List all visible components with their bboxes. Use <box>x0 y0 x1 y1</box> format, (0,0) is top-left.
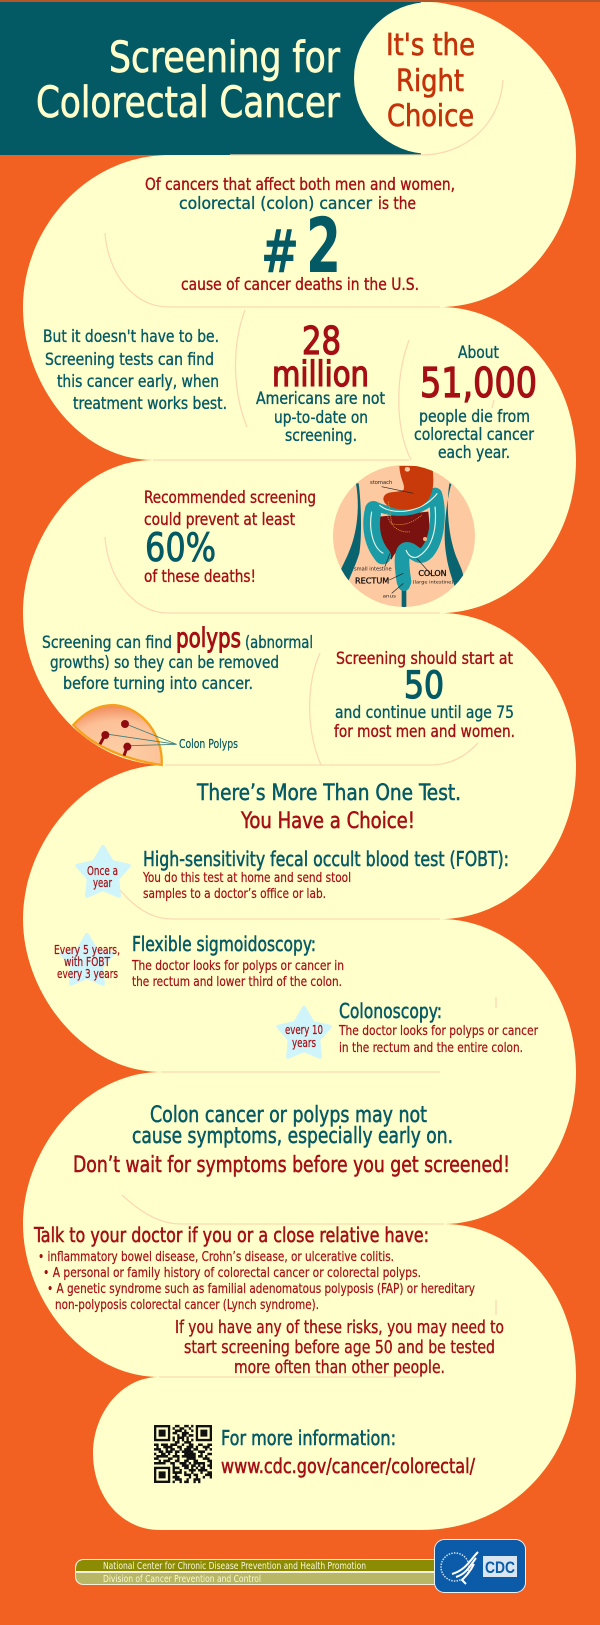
stat: 51,000: people die from <box>419 407 530 427</box>
text: no symptoms warning: Colon cancer or polyps may not <box>150 1103 427 1128</box>
risk factors list <box>33 1223 475 1313</box>
tagline: It's the Right Choice: It's the <box>386 28 475 63</box>
text: no symptoms warning: cause symptoms, especially early on. <box>132 1124 453 1149</box>
risk factors list: • A genetic syndrome such as familial adenomatous polyposis (FAP) or hereditary <box>47 1281 475 1297</box>
footer agency bar: National Center for Chronic Disease Prevention and Health Promotion <box>103 1561 366 1572</box>
stat: 28 million: Americans are not <box>256 389 385 409</box>
icon: digestive system anatomy: (large intestine) <box>413 580 454 586</box>
risk factors list: • inflammatory bowel disease, Crohn’s disease, or ulcerative colitis. <box>38 1249 394 1265</box>
test: colonoscopy: The doctor looks for polyps or cancer <box>338 1023 538 1039</box>
risk factors list: • A personal or family history of colorectal cancer or colorectal polyps. <box>43 1265 421 1281</box>
stat: 51,000: 51,000 <box>420 359 537 407</box>
label: Colon Polyps: Colon Polyps <box>179 737 238 751</box>
icon: star every 10 years <box>278 1008 330 1057</box>
title <box>36 33 340 128</box>
text: polyps: Screening can find <box>42 633 172 653</box>
CDC and HHS logo: CDC <box>485 1558 515 1577</box>
text: earlier screening advice: more often than other people. <box>234 1357 445 1378</box>
stat: 51,000: each year. <box>438 443 510 463</box>
tagline: It's the Right Choice <box>386 28 475 134</box>
caption: cause of cancer deaths in the U.S. <box>181 275 419 295</box>
title: Screening for <box>109 33 340 83</box>
intro text <box>145 175 455 214</box>
intro text: colorectal (colon) cancer <box>179 194 373 214</box>
icon: QR code <box>154 1425 212 1483</box>
stat: 28 million: million <box>272 355 369 395</box>
stat: start at 50: 50 <box>404 664 444 707</box>
risk factors list: Talk to your doctor if you or a close relative have: <box>33 1223 429 1247</box>
test: FOBT: High-sensitivity fecal occult blood test (FOBT): <box>143 847 509 871</box>
stat: 28 million: up-to-date on <box>274 408 368 428</box>
stat: start at 50: Screening should start at <box>336 649 513 669</box>
text: polyps: polyps <box>176 623 241 654</box>
test: FOBT: You do this test at home and send stool <box>142 870 351 886</box>
text: it doesn't have to be <box>43 327 227 414</box>
stat: start at 50: and continue until age 75 <box>335 703 514 723</box>
stat: prevent 60%: 60% <box>145 526 216 571</box>
CDC and HHS logo <box>434 1540 526 1592</box>
test: flexible sigmoidoscopy <box>131 932 344 990</box>
icon: star every 10 years: every 10 <box>285 1023 323 1037</box>
text: earlier screening advice: start screening before age 50 and be tested <box>184 1337 495 1358</box>
more information link: For more information: <box>221 1426 396 1450</box>
text: no symptoms warning: Don’t wait for symptoms before you get screened! <box>73 1153 510 1178</box>
icon: star every 5 years: every 3 years <box>57 967 118 981</box>
text: no symptoms warning <box>73 1103 510 1178</box>
text: polyps: (abnormal <box>245 633 313 653</box>
big number #2: # <box>261 217 299 287</box>
intro text: is the <box>378 194 416 214</box>
icon: star once a year: year <box>93 876 112 890</box>
heading: more than one test <box>196 781 461 834</box>
more information link: www.cdc.gov/cancer/colorectal/ <box>221 1454 476 1478</box>
big number #2: 2 <box>306 201 341 290</box>
title: Colorectal Cancer <box>36 78 340 128</box>
stat: 51,000: colorectal cancer <box>414 425 535 445</box>
stat: 28 million <box>256 319 385 446</box>
stat: prevent 60%: of these deaths! <box>144 567 256 587</box>
test: colonoscopy <box>338 999 538 1056</box>
tagline: It's the Right Choice: Right <box>396 64 464 99</box>
stat: start at 50 <box>334 649 515 742</box>
text: it doesn't have to be: treatment works best. <box>73 394 227 414</box>
panel: number two cause <box>145 175 455 295</box>
stat: prevent 60% <box>144 488 316 587</box>
intro text: Of cancers that affect both men and women, <box>145 175 455 195</box>
icon: colon polyps diagram <box>73 705 177 765</box>
stat: 28 million: 28 <box>302 319 341 363</box>
heading: more than one test: You Have a Choice! <box>240 809 415 834</box>
stat: prevent 60%: could prevent at least <box>144 510 295 530</box>
icon: digestive system anatomy: anus <box>383 594 396 599</box>
icon: star every 5 years <box>54 935 120 984</box>
risk factors list: non-polyposis colorectal cancer (Lynch syndrome). <box>55 1297 319 1313</box>
text: it doesn't have to be: this cancer early, when <box>57 372 219 392</box>
icon: star every 10 years: years <box>292 1036 316 1050</box>
test: FOBT: samples to a doctor’s office or lab. <box>143 886 326 902</box>
heading: more than one test: There’s More Than One Test. <box>196 781 461 806</box>
stat: 51,000: About <box>458 343 499 363</box>
cream circle behind tagline <box>354 2 506 154</box>
icon: star every 5 years: Every 5 years, <box>54 943 120 957</box>
footer agency bar: Division of Cancer Prevention and Control <box>103 1574 261 1585</box>
icon: digestive system anatomy: COLON <box>418 569 447 578</box>
test: FOBT <box>142 847 509 902</box>
text: polyps <box>42 623 313 694</box>
test: colonoscopy: in the rectum and the entire colon. <box>339 1040 523 1056</box>
stat: prevent 60%: Recommended screening <box>144 488 316 508</box>
text: it doesn't have to be: Screening tests can find <box>45 350 214 370</box>
test: colonoscopy: Colonoscopy: <box>339 999 442 1023</box>
title banner <box>0 2 421 155</box>
icon: digestive system anatomy <box>333 465 475 608</box>
test: flexible sigmoidoscopy: The doctor looks for polyps or cancer in <box>131 958 344 974</box>
icon: star once a year: Once a <box>87 864 118 878</box>
text: earlier screening advice: If you have any of these risks, you may need to <box>175 1317 504 1338</box>
text: it doesn't have to be: But it doesn't have to be. <box>43 327 219 347</box>
test: flexible sigmoidoscopy: Flexible sigmoidoscopy: <box>132 932 316 956</box>
test: flexible sigmoidoscopy: the rectum and lower third of the colon. <box>132 974 342 990</box>
text: polyps: before turning into cancer. <box>63 674 253 694</box>
icon: star once a year <box>77 847 129 896</box>
stat: 51,000 <box>414 343 537 463</box>
footer agency bar <box>75 1559 445 1585</box>
stat: 28 million: screening. <box>285 426 357 446</box>
icon: digestive system anatomy: RECTUM <box>355 577 389 586</box>
tagline: It's the Right Choice: Choice <box>387 99 474 134</box>
icon: digestive system anatomy: small intestine <box>354 567 392 573</box>
icon: star every 5 years: with FOBT <box>64 955 110 969</box>
more information link <box>221 1426 476 1478</box>
text: polyps: growths) so they can be removed <box>50 653 279 673</box>
stat: start at 50: for most men and women. <box>334 722 515 742</box>
big number #2 <box>261 201 341 290</box>
icon: digestive system anatomy: stomach <box>370 480 393 486</box>
text: earlier screening advice <box>175 1317 504 1378</box>
